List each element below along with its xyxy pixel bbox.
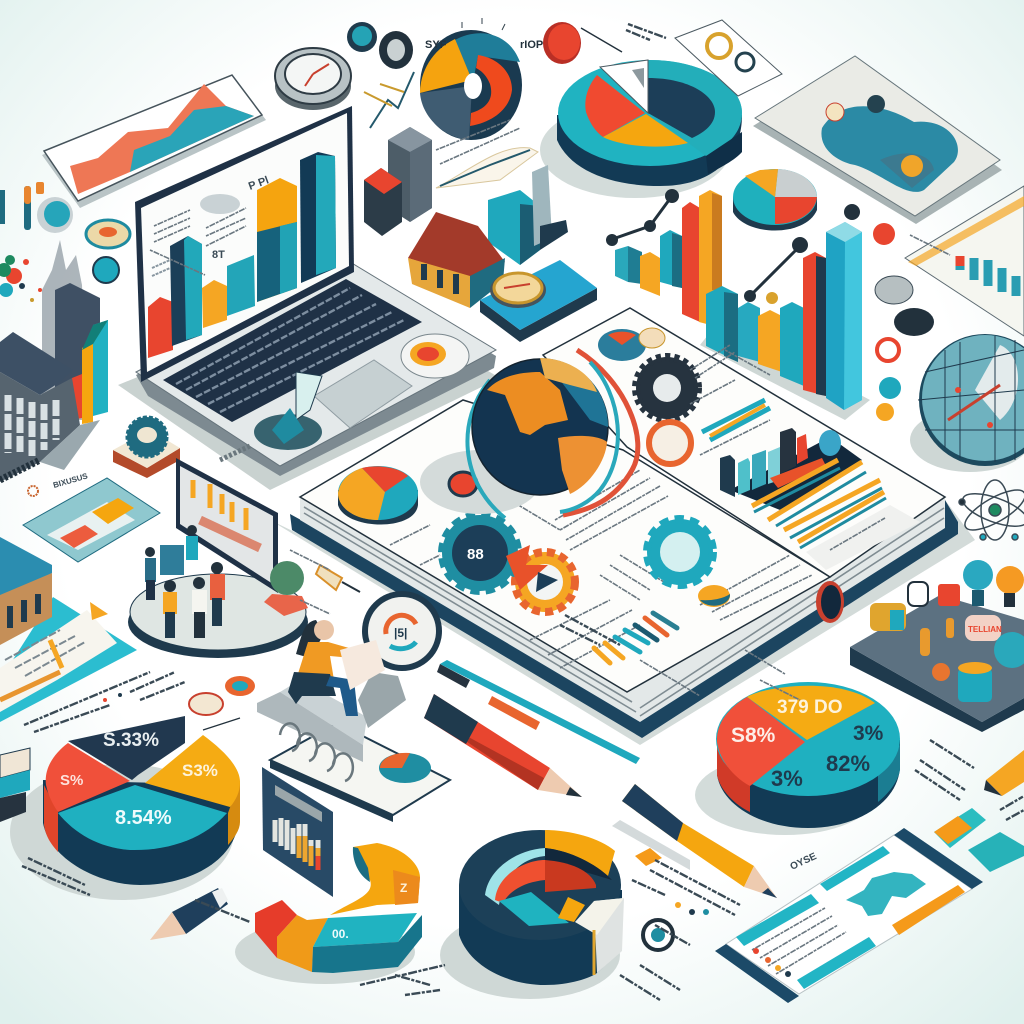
pen caption: [632, 848, 819, 915]
right pie labels: 3%: [853, 722, 884, 745]
caption text left: [22, 672, 185, 895]
pie slices: [46, 716, 240, 850]
right pie labels: [731, 697, 884, 791]
people: [145, 525, 225, 638]
globe shadow: [420, 450, 540, 514]
pie labels: S3%: [182, 761, 218, 780]
colored dot cluster: [0, 255, 42, 302]
small label by tile: [28, 471, 89, 496]
desk figure: [220, 372, 322, 460]
globe: [467, 350, 638, 518]
bulbs: [963, 560, 993, 590]
sketch ribbon: [436, 120, 538, 188]
right side small icons: [873, 223, 934, 421]
left page text: [390, 470, 668, 668]
dark cover chart: [262, 767, 333, 897]
donut pie: dark top: rIOP: [520, 39, 543, 51]
small label by tile: BIXUSUS: [52, 471, 89, 490]
pen caption: OYSE: [789, 851, 819, 873]
small round badges: [347, 22, 666, 69]
small pill: [698, 585, 730, 607]
gabled hall: [0, 332, 100, 482]
curved ring chart: [235, 843, 422, 984]
right pie labels: 82%: [826, 751, 870, 776]
bottom left pie chart: [10, 716, 240, 900]
small pie: [733, 169, 817, 230]
right bottom tiles: [934, 750, 1024, 872]
area chart sheet: [42, 75, 266, 208]
house: [408, 212, 505, 308]
small chips pair: [189, 676, 255, 715]
heat grid tile: [23, 478, 160, 562]
right pie labels: 379 DO: [777, 697, 842, 718]
laptop: [118, 106, 500, 490]
left edge icons: [0, 182, 130, 283]
red stamp: [449, 472, 477, 496]
teal tower: [488, 165, 568, 265]
laptop shadow: [118, 290, 500, 490]
pencil capsule: [316, 565, 360, 592]
screen bars: [148, 152, 336, 358]
right page: [543, 308, 945, 577]
innovation platform: [850, 560, 1024, 732]
book stack with compass: [480, 260, 597, 342]
gear badge: [643, 920, 673, 950]
curved ring chart: Z: [400, 881, 407, 895]
tire donut chart: [440, 830, 624, 999]
left edge book stack: [0, 748, 30, 822]
right page chart: [720, 428, 920, 570]
right page orange ring and stripes: [649, 400, 770, 464]
pie labels: S.33%: [103, 730, 159, 751]
left page: [300, 400, 830, 692]
book base: [290, 500, 958, 738]
note card: [675, 20, 782, 96]
book shadow: [270, 500, 975, 745]
gothic building: [42, 240, 108, 424]
pie labels: S%: [60, 772, 83, 789]
right page gear teal: [647, 519, 713, 585]
large top pie: [540, 60, 742, 198]
atom diagram: [959, 480, 1024, 540]
pie labels: 8.54%: [115, 807, 172, 829]
laptop keyboard: [163, 279, 422, 422]
left page mini bars: [594, 613, 677, 663]
magnifier reader: [257, 591, 450, 822]
right pie chart: [695, 682, 900, 835]
open book: [270, 308, 975, 745]
line sketch chart: [364, 72, 414, 128]
server blocks: [364, 127, 432, 236]
bottom left pencil: [150, 888, 228, 940]
right page gear: [636, 357, 698, 419]
laptop side dial: [401, 334, 469, 378]
page stack: [300, 497, 945, 722]
right chart document: [905, 186, 1024, 336]
stopwatch dial: [275, 48, 351, 110]
pie labels: [60, 730, 218, 829]
red pencil: [424, 694, 582, 797]
laptop: 8T: [212, 249, 225, 261]
gear on book stack: [113, 417, 180, 478]
presentation screen: [176, 458, 278, 593]
donut pie: dark top: [420, 18, 543, 140]
plant: [264, 594, 308, 616]
right pie labels: 3%: [771, 766, 803, 791]
magnifier reader: |5|: [394, 626, 407, 640]
presentation stage with people: [128, 458, 308, 658]
laptop base: [136, 268, 496, 476]
donut pie: dark top: SYF: [425, 39, 447, 51]
curved ring chart: 00.: [332, 927, 349, 941]
laptop: P Pl: [247, 174, 271, 193]
innovation platform: TELLIAN: [968, 625, 1002, 634]
ring binder doc: [270, 723, 450, 815]
spine clasp: [816, 581, 844, 623]
right pie labels: S8%: [731, 724, 776, 747]
touchpad: [314, 360, 412, 428]
right globe: [910, 334, 1024, 472]
reader: [288, 620, 385, 716]
map document: [753, 56, 1002, 224]
left page gears: [442, 515, 575, 612]
left page gears: 88: [467, 546, 484, 563]
laptop screen: [135, 106, 354, 382]
right page top pie: [598, 328, 665, 361]
left page pie: [338, 466, 418, 525]
yellow pen: [612, 784, 777, 898]
left open book with building: [0, 537, 137, 722]
big bar chart: [606, 189, 870, 420]
thin pen: [437, 660, 640, 764]
scattered text blocks: [150, 235, 974, 1000]
bottom brochure: [715, 828, 983, 1003]
binder bar: [280, 680, 367, 745]
